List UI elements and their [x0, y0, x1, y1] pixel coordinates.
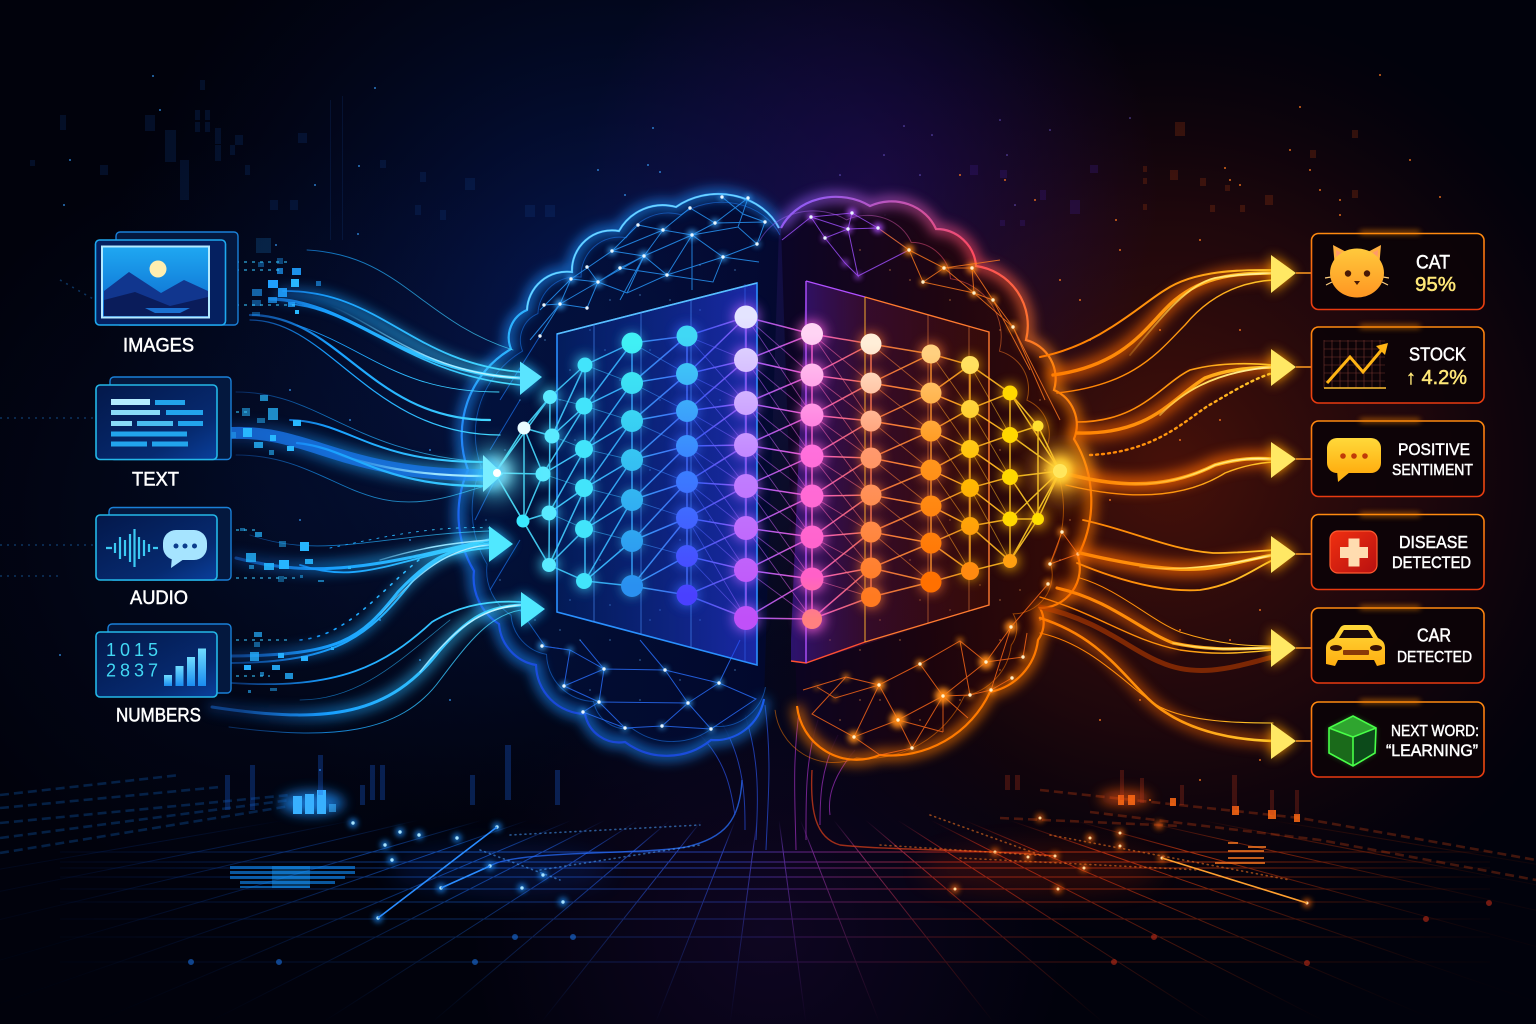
brain sparkle dust	[486, 265, 735, 700]
neural network connections	[495, 317, 1060, 619]
stream: audio	[236, 528, 489, 572]
input arrows	[483, 361, 545, 627]
icon: stock chart	[1324, 340, 1388, 388]
stream: images	[250, 250, 520, 435]
input card: text	[96, 377, 231, 490]
data particles left	[0, 238, 351, 693]
icon: speech bubble	[163, 530, 207, 568]
data blocks on floor	[230, 842, 1266, 888]
card top glows	[1360, 231, 1420, 703]
input streams (blue)	[212, 250, 521, 733]
lobe star nodes	[538, 194, 1082, 751]
arrow: text	[483, 455, 503, 492]
stream: stock	[1077, 364, 1273, 455]
equalizer bars	[293, 790, 336, 814]
brain roots	[700, 705, 855, 850]
input card: audio	[96, 508, 231, 609]
stream: text	[232, 392, 482, 502]
result: sentiment: POSITIVE	[1398, 440, 1470, 459]
glow pools	[280, 791, 344, 815]
output card: cat: 95%	[1415, 274, 1456, 296]
arrow: disease	[1271, 536, 1296, 573]
output card: positive sentiment: SENTIMENT	[1392, 462, 1473, 479]
output card: disease detected: DETECTED	[1392, 554, 1471, 572]
icon: green cube	[1329, 716, 1376, 766]
label: images: IMAGES	[123, 336, 194, 356]
label: text: TEXT	[132, 470, 179, 490]
output card: disease detected	[1312, 514, 1484, 590]
output card: next word: “LEARNING”	[1386, 742, 1478, 760]
neural network nodes glow	[481, 317, 1076, 619]
hub glow	[1036, 446, 1088, 498]
hub glow	[471, 449, 519, 497]
arrow: images	[520, 362, 542, 395]
lobe meshes	[475, 197, 1078, 755]
arrow: cat	[1271, 255, 1296, 293]
icon: bar chart	[164, 648, 206, 686]
result: car: CAR	[1417, 626, 1451, 646]
arrow: next word	[1271, 723, 1296, 759]
icon: cat	[1325, 245, 1389, 298]
left hemisphere	[459, 194, 780, 756]
output card: stock	[1312, 327, 1484, 403]
icon: speech bubble	[1327, 438, 1381, 482]
output card: positive sentiment	[1312, 421, 1484, 496]
brain	[459, 194, 1091, 763]
stream: numbers	[212, 602, 521, 733]
bottom perspective grid floor	[0, 737, 1536, 1024]
arrow: sentiment	[1271, 442, 1296, 478]
label: numbers: NUMBERS	[116, 706, 201, 726]
stream: sentiment	[1060, 459, 1273, 495]
arrow: numbers	[521, 592, 545, 627]
neural network nodes	[489, 306, 1044, 630]
stream: car	[1040, 578, 1273, 670]
result: disease: DISEASE	[1399, 532, 1468, 552]
digits: 1015	[106, 640, 158, 660]
stream: cat	[1040, 270, 1273, 393]
icon: text lines	[111, 399, 203, 446]
output arrows	[1271, 255, 1311, 759]
output card: stock: ↑ 4.2%	[1406, 367, 1467, 389]
arrow: car	[1271, 629, 1296, 667]
icon: waveform	[106, 529, 158, 567]
result: cat: CAT	[1416, 252, 1450, 274]
input card: numbers	[96, 624, 231, 726]
right hemisphere	[759, 197, 1091, 763]
result: stock: STOCK	[1409, 344, 1467, 364]
output streams (orange)	[1036, 270, 1273, 741]
output card: car detected: DETECTED	[1397, 649, 1472, 666]
output card: next word	[1312, 702, 1484, 777]
glass panel left	[557, 283, 757, 665]
icon: landscape photo	[102, 246, 209, 318]
stream: disease	[1077, 520, 1273, 590]
output card: car detected	[1312, 608, 1484, 683]
input card: images	[96, 232, 238, 356]
data rows	[0, 775, 1536, 880]
floor dots	[353, 823, 563, 918]
stream: numbers to audio arrow	[232, 545, 489, 663]
label: audio: AUDIO	[130, 588, 188, 609]
result: next word: NEXT WORD:	[1391, 723, 1479, 740]
input card: numbers: 2837	[106, 660, 158, 680]
icon: medical cross	[1330, 531, 1377, 573]
glass panel right	[791, 281, 989, 663]
root sweeps	[490, 770, 1055, 866]
arrow: audio	[489, 526, 513, 562]
output card: cat	[1312, 234, 1484, 310]
arrow: stock	[1271, 349, 1296, 386]
stream: next word	[1040, 618, 1273, 741]
icon: car	[1326, 625, 1385, 666]
